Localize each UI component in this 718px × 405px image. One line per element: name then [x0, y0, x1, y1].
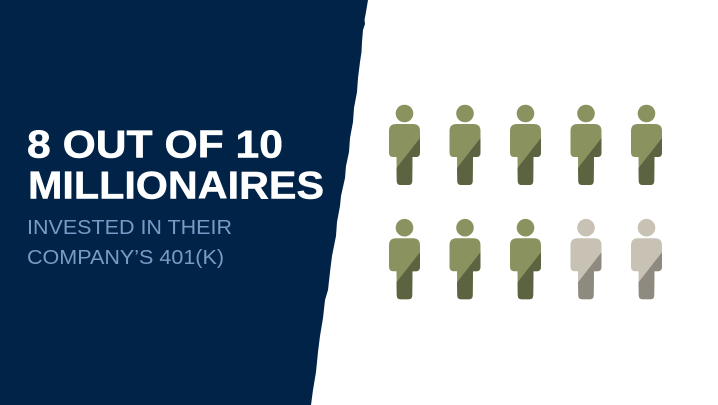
- title: MILLIONAIRES: [28, 164, 324, 207]
- person 5: [631, 105, 662, 185]
- person 10 (grey): [631, 219, 662, 299]
- person 2: [450, 105, 480, 185]
- subtitle: INVESTED IN THEIR: [27, 216, 232, 239]
- person 6: [389, 219, 420, 299]
- person 4: [570, 105, 602, 185]
- person 9 (grey): [570, 219, 602, 299]
- title: 8 OUT OF 10: [27, 124, 283, 166]
- person 3: [510, 105, 541, 185]
- subtitle: COMPANY’S 401(K): [27, 246, 224, 269]
- navy panel with brushed edge: [0, 0, 368, 405]
- pictogram: 8 of 10 people highlighted: [389, 105, 662, 299]
- person 1: [389, 105, 420, 185]
- subtitle: [27, 216, 232, 269]
- title: [27, 124, 324, 207]
- person 8: [510, 219, 541, 299]
- person 7: [450, 219, 480, 299]
